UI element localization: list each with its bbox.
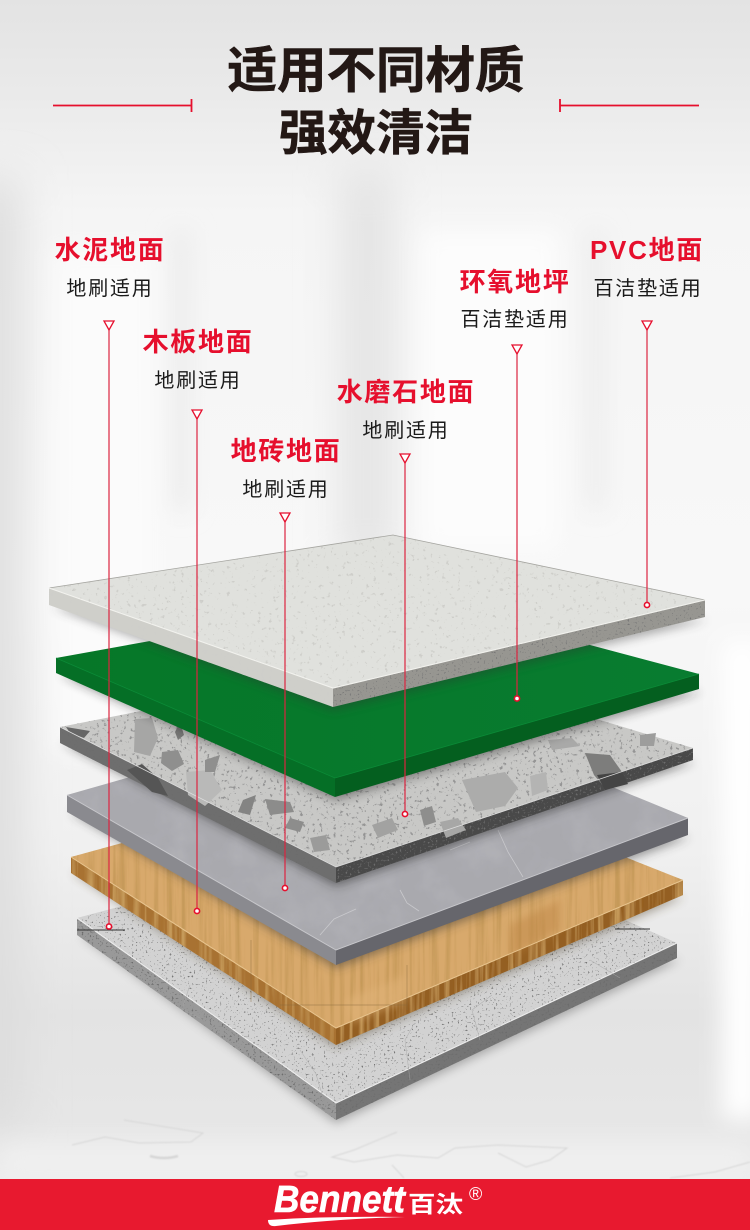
callout: 地砖地面: 地砖地面 <box>231 436 341 466</box>
title: 适用不同材质 <box>228 44 524 98</box>
callout: 环氧地坪 <box>460 267 570 701</box>
callout: PVC地面 <box>590 235 704 608</box>
callout: 水泥地面 <box>55 235 165 929</box>
callout: 水磨石地面: 水磨石地面 <box>337 377 475 407</box>
callout: 环氧地坪: 百洁垫适用 <box>460 308 570 331</box>
callout: PVC地面: PVC地面 <box>590 235 704 265</box>
callout: 木板地面 <box>143 327 253 914</box>
title: 强效清洁 <box>279 106 473 160</box>
footer band <box>0 1179 750 1230</box>
logo: Bennett 百汰: Bennett <box>274 1179 406 1221</box>
callout: 环氧地坪: 环氧地坪 <box>460 267 570 297</box>
slab: grey marble <box>67 700 690 968</box>
logo: Bennett 百汰: 百汰 <box>408 1191 463 1217</box>
callout: 地砖地面 <box>231 436 341 891</box>
right title rule <box>560 99 699 112</box>
callout: 水磨石地面: 地刷适用 <box>362 419 450 442</box>
title <box>228 44 524 160</box>
callout: 木板地面: 木板地面 <box>143 327 253 357</box>
slab: green epoxy <box>56 600 702 800</box>
left title rule <box>53 99 192 112</box>
logo: Bennett 百汰: ® <box>469 1184 482 1204</box>
callout: 水泥地面: 地刷适用 <box>66 277 154 300</box>
callout: 木板地面: 地刷适用 <box>154 369 242 392</box>
callout: 地砖地面: 地刷适用 <box>242 478 330 501</box>
slab: aggregate terrazzo <box>60 660 695 886</box>
slab: concrete floor <box>77 800 680 1123</box>
slab: wood floor <box>71 768 684 1047</box>
logo: Bennett 百汰 <box>268 1179 482 1226</box>
callout: 水磨石地面 <box>337 377 475 817</box>
callout: PVC地面: 百洁垫适用 <box>594 277 702 300</box>
callout: 水泥地面: 水泥地面 <box>55 235 165 265</box>
slab: light terrazzo <box>49 535 708 710</box>
